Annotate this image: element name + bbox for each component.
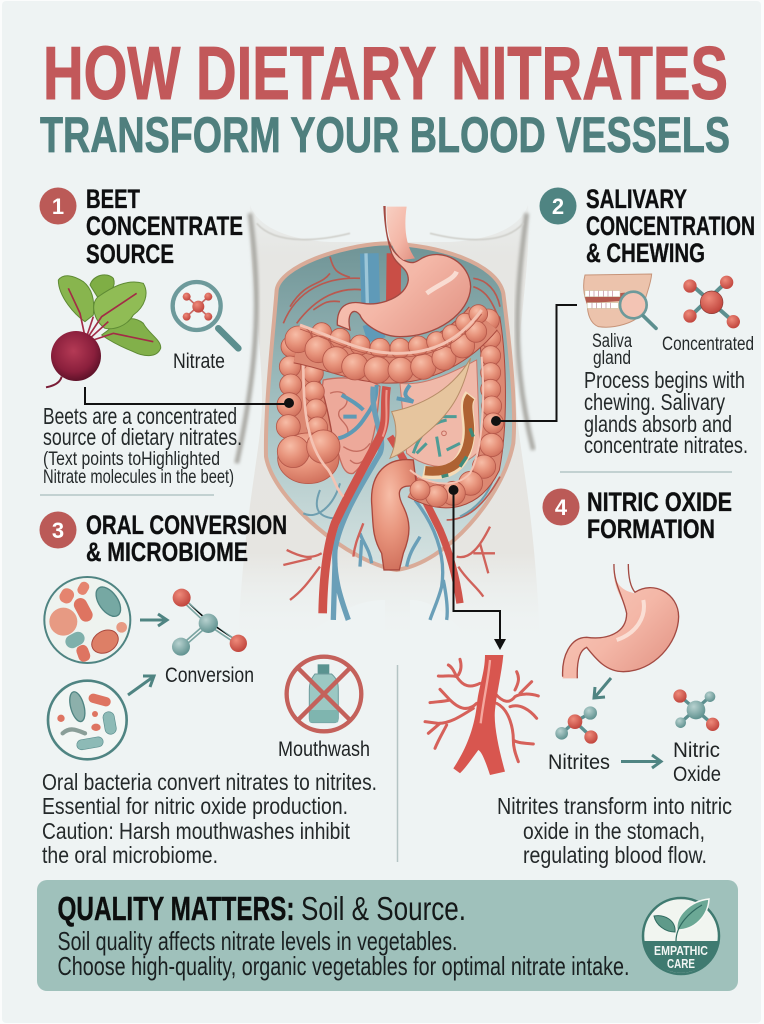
number badge 1 <box>40 188 76 224</box>
heading 1: BEET <box>86 184 140 214</box>
heading 3 <box>86 510 287 567</box>
arrow: stomach to nitrites <box>594 678 611 698</box>
icon: jaw with magnifier <box>584 274 656 328</box>
veins lower <box>333 387 382 620</box>
text: nitric oxide description: oxide in the stomach, <box>523 818 705 844</box>
icon: stomach <box>563 563 679 678</box>
label: saliva gland <box>592 331 632 369</box>
label: nitrites: Nitrites <box>548 751 610 774</box>
icon: microbiome circle large <box>44 577 130 663</box>
panel 1: beet concentrate source <box>40 184 243 488</box>
label: mouthwash: Mouthwash <box>278 738 370 761</box>
text: oral conversion description: Oral bacteria convert nitrates to nitrites. <box>42 769 377 795</box>
vena cava upper <box>369 253 377 340</box>
label: saliva gland: gland <box>593 348 631 369</box>
panel 3: oral conversion and microbiome <box>40 510 377 868</box>
text: salivary description: chewing. Salivary <box>584 389 725 415</box>
icon: blood vessel <box>425 655 538 775</box>
callout text <box>58 926 630 981</box>
arrow: microbiome to conversion <box>140 614 167 626</box>
opened colon inset <box>423 395 471 473</box>
number badge 3: 3 <box>52 518 64 543</box>
torso silhouette <box>238 205 540 640</box>
transverse colon <box>297 318 483 365</box>
panel 4: nitric oxide formation <box>425 487 732 868</box>
number badge 4: 4 <box>555 495 568 520</box>
text: nitric oxide description: Nitrites transform into nitric <box>497 793 732 819</box>
callout heading: QUALITY MATTERS: <box>58 890 294 927</box>
heading 2: & CHEWING <box>586 238 705 268</box>
stomach and esophagus <box>337 207 471 337</box>
leader arrow: colon to vessels <box>448 485 506 650</box>
label: nitric oxide <box>673 739 721 786</box>
leader line: beet to colon <box>85 387 294 408</box>
torso edge shading <box>237 213 256 463</box>
label: nitric oxide: Nitric <box>673 739 720 762</box>
heading 4: FORMATION <box>587 514 715 544</box>
heading 1 <box>86 184 243 269</box>
central anatomy illustration <box>237 205 540 640</box>
icon: concentrated molecule <box>683 276 740 328</box>
ascending colon <box>288 347 335 470</box>
peeled tissue flap <box>390 358 471 458</box>
panel 2: salivary concentration <box>540 184 755 458</box>
callout text: Soil quality affects nitrate levels in vegetables. <box>58 926 458 956</box>
small intestine <box>322 378 380 474</box>
heading 3: ORAL CONVERSION <box>86 510 287 540</box>
number badge 3 <box>40 512 76 548</box>
background vessels in cavity <box>283 257 500 520</box>
leader line: salivary to colon <box>491 305 577 426</box>
heading 1: CONCENTRATE <box>86 211 243 241</box>
icon: microbiome circle small <box>48 681 127 759</box>
heading 4: NITRIC OXIDE <box>587 487 732 517</box>
icon: conversion molecule <box>172 589 247 656</box>
abdominal cavity <box>266 243 514 570</box>
aorta upper <box>371 253 416 303</box>
logo: empathic care: EMPATHIC <box>654 943 708 958</box>
text: oral conversion description: Caution: Harsh mouthwashes inhibit <box>42 818 350 844</box>
number badge 2 <box>540 188 576 224</box>
text: beet description: Nitrate molecules in the beet) <box>43 467 234 488</box>
icon: no mouthwash <box>287 657 361 731</box>
label: saliva gland: Saliva <box>592 331 632 352</box>
descending colon <box>413 318 494 496</box>
text: oral conversion description: Essential for nitric oxide production. <box>42 793 348 819</box>
number badge 2: 2 <box>552 194 564 219</box>
text: beet description: (Text points toHighlighted <box>43 449 220 470</box>
iliac arteries <box>323 387 387 613</box>
sigmoid and rectum <box>372 460 417 570</box>
heading 2: SALIVARY <box>586 184 687 214</box>
heading 3: & MICROBIOME <box>86 537 248 567</box>
arrow: nitrites to nitric oxide <box>621 755 661 768</box>
icon: nitrites molecule <box>555 706 598 744</box>
mesenteric veins <box>338 385 413 438</box>
callout heading: Soil & Source. <box>301 890 466 927</box>
label: nitrate: Nitrate <box>173 350 225 373</box>
logo: empathic care: CARE <box>667 956 695 971</box>
logo: empathic care <box>643 898 719 974</box>
icon: nitrate magnifier <box>173 282 238 348</box>
text: nitric oxide description: regulating blood flow. <box>523 842 707 868</box>
heading 2 <box>586 184 755 268</box>
heading 1: SOURCE <box>86 239 174 269</box>
title <box>40 31 730 163</box>
text: beet description: source of dietary nitrates. <box>43 424 242 450</box>
text: oral conversion description: the oral microbiome. <box>42 842 218 868</box>
number badge 4 <box>542 488 580 526</box>
text: beet description <box>43 403 242 488</box>
text: beet description: Beets are a concentrated <box>43 403 237 429</box>
arrow: small microbiome to conversion <box>128 676 154 695</box>
label: conversion: Conversion <box>165 664 254 687</box>
text: nitric oxide description <box>497 793 732 868</box>
number badge 1: 1 <box>52 194 64 219</box>
text: oral conversion description <box>42 769 377 868</box>
label: nitric oxide: Oxide <box>673 763 721 786</box>
callout: quality matters <box>37 880 738 991</box>
icon: nitric oxide molecule <box>673 689 719 731</box>
heading 4 <box>587 487 732 544</box>
text: salivary description <box>584 367 748 458</box>
icon: beet <box>46 275 161 387</box>
